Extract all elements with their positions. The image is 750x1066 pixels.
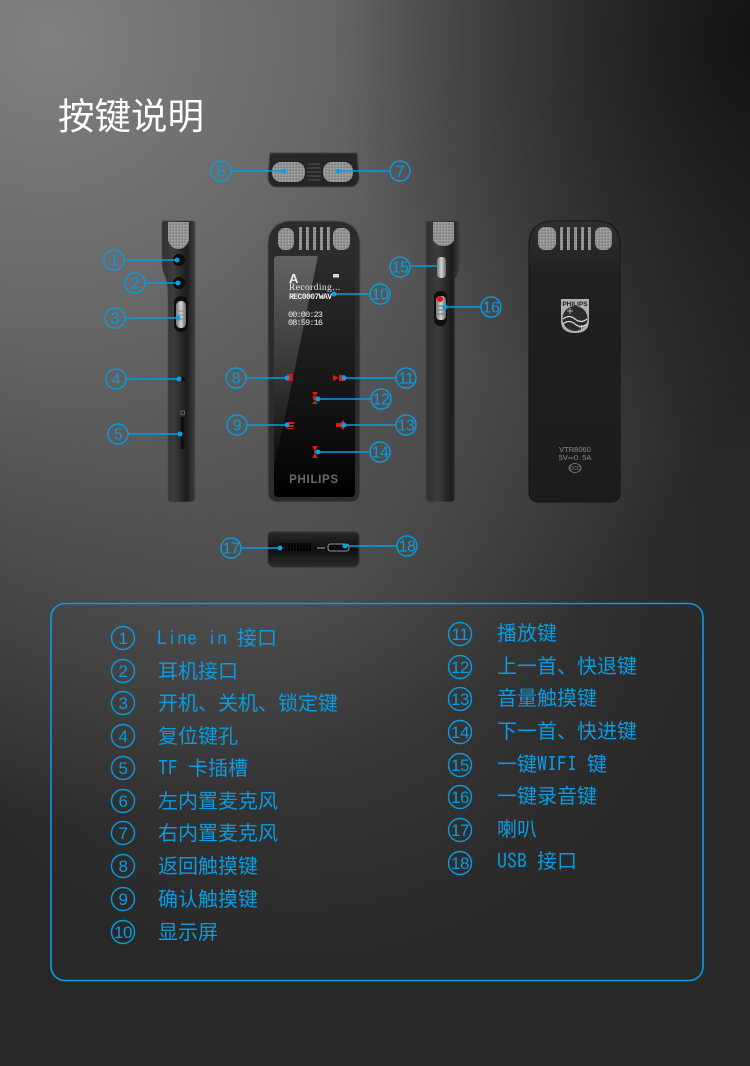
callout 8: 8 bbox=[232, 370, 241, 388]
callout 11: 11 bbox=[398, 370, 414, 388]
item 2: 2 bbox=[119, 662, 128, 681]
logo: PHILIPS wordmark: PHILIPS bbox=[289, 474, 339, 486]
item 4 bbox=[112, 720, 238, 749]
item 11 bbox=[448, 617, 557, 646]
callout 18: 18 bbox=[399, 538, 416, 556]
item 15 bbox=[448, 748, 607, 777]
callout 14 bbox=[316, 442, 390, 462]
item 7: 右内置麦克风 bbox=[158, 817, 278, 846]
logo: Philips shield: PHILIPS bbox=[562, 301, 588, 308]
callout 16: 16 bbox=[483, 300, 500, 316]
item 3: 开机、关机、锁定键 bbox=[158, 687, 338, 716]
callout 6 bbox=[211, 161, 286, 181]
touch icons bbox=[287, 374, 345, 458]
legend panel bbox=[51, 604, 703, 980]
port: line in bbox=[173, 254, 185, 266]
device: bottom view bbox=[268, 532, 359, 567]
reset hole bbox=[181, 377, 185, 381]
logo: Philips shield bbox=[561, 299, 589, 333]
item 10: 10 bbox=[114, 923, 132, 942]
callout 8 bbox=[226, 368, 290, 388]
speaker holes bbox=[280, 543, 310, 551]
screen text: A bbox=[289, 271, 299, 286]
item 9: 9 bbox=[119, 890, 128, 909]
item 4: 4 bbox=[119, 727, 128, 746]
item 14: 14 bbox=[451, 723, 469, 742]
WIFI button bbox=[437, 257, 446, 278]
item 6: 左内置麦克风 bbox=[158, 785, 278, 814]
device: back view bbox=[529, 221, 620, 502]
item 6: 6 bbox=[119, 792, 128, 811]
item 4: 复位键孔 bbox=[158, 720, 238, 749]
item 18 bbox=[448, 845, 577, 874]
callout 1 bbox=[104, 250, 180, 270]
screen text bbox=[288, 271, 340, 328]
item 8 bbox=[112, 850, 258, 879]
callout 2: 2 bbox=[131, 276, 140, 292]
item 7: 7 bbox=[119, 824, 128, 843]
item 17: 17 bbox=[451, 821, 469, 840]
callout 4: 4 bbox=[112, 372, 121, 388]
item 16: 16 bbox=[451, 788, 469, 807]
item 14: 下一首、快进键 bbox=[497, 715, 637, 744]
device: top view bbox=[268, 153, 359, 187]
item 16 bbox=[448, 780, 597, 809]
item 18: 18 bbox=[451, 854, 469, 873]
device: left side view bbox=[162, 221, 195, 502]
item 5 bbox=[112, 752, 248, 781]
model label: 5V⎓0. 5A bbox=[559, 453, 591, 462]
callout 1: 1 bbox=[110, 252, 119, 270]
callout 3: 3 bbox=[111, 310, 120, 328]
screen text: REC0007WAV bbox=[289, 293, 332, 302]
model label: CCC bbox=[570, 466, 581, 472]
callout 10 bbox=[332, 284, 390, 304]
callout 15 bbox=[390, 257, 438, 277]
callout 9: 9 bbox=[233, 418, 242, 434]
legend column: 1 to 10 bbox=[112, 622, 338, 945]
title: 按键说明 bbox=[58, 96, 204, 137]
item 10 bbox=[112, 916, 218, 945]
callout 4 bbox=[106, 369, 182, 389]
callout 5: 5 bbox=[114, 426, 123, 444]
callout 13 bbox=[342, 415, 416, 435]
item 1: 1 bbox=[119, 629, 128, 648]
item 12: 上一首、快退键 bbox=[497, 650, 637, 679]
callout 7 bbox=[336, 161, 410, 181]
item 2 bbox=[112, 655, 238, 684]
item 8: 返回触摸键 bbox=[158, 850, 258, 879]
callout 7: 7 bbox=[396, 164, 405, 180]
item 13: 音量触摸键 bbox=[497, 682, 597, 711]
item 9 bbox=[112, 883, 258, 912]
model label bbox=[559, 445, 591, 472]
item 8: 8 bbox=[119, 857, 128, 876]
item 3: 3 bbox=[119, 694, 128, 713]
callout 9 bbox=[227, 415, 290, 435]
callout 3 bbox=[105, 308, 180, 328]
screen text: 08:59:16 bbox=[288, 318, 323, 328]
item 5: 5 bbox=[119, 759, 128, 778]
callout 5 bbox=[108, 424, 182, 444]
callout 6: 6 bbox=[217, 164, 226, 180]
callout 11 bbox=[342, 368, 416, 388]
item 13: 13 bbox=[451, 690, 469, 709]
item 1: Line in 接口 bbox=[157, 622, 277, 651]
item 10: 显示屏 bbox=[158, 916, 218, 945]
item 13 bbox=[448, 682, 597, 711]
screen text: 00:00:23 bbox=[288, 310, 323, 320]
callout 12: 12 bbox=[373, 392, 390, 408]
item 16: 一键录音键 bbox=[497, 780, 597, 809]
callout 14: 14 bbox=[372, 444, 389, 462]
callout 2 bbox=[125, 273, 180, 293]
callout 18 bbox=[342, 536, 417, 556]
TF card slot bbox=[180, 417, 184, 449]
callout 15: 15 bbox=[392, 260, 409, 276]
item 2: 耳机接口 bbox=[158, 655, 238, 684]
callout 17 bbox=[221, 538, 282, 558]
USB port bbox=[328, 544, 349, 551]
item 15: 一键WIFI 键 bbox=[497, 748, 607, 777]
screen text: Recording... bbox=[289, 283, 340, 293]
item 17: 喇叭 bbox=[497, 813, 537, 842]
front microphone grilles bbox=[278, 227, 350, 250]
port: earphone bbox=[173, 277, 185, 289]
item 12: 12 bbox=[451, 658, 469, 677]
item 17 bbox=[448, 813, 537, 842]
record switch bbox=[434, 291, 447, 326]
callout 16 bbox=[442, 297, 501, 317]
callout 10: 10 bbox=[372, 286, 389, 304]
item 11: 播放键 bbox=[497, 617, 557, 646]
item 18: USB 接口 bbox=[497, 845, 577, 874]
callout 17: 17 bbox=[223, 540, 240, 558]
item 15: 15 bbox=[451, 756, 469, 775]
screen bbox=[274, 256, 355, 497]
item 5: TF 卡插槽 bbox=[158, 752, 248, 781]
item 11: 11 bbox=[452, 625, 468, 644]
callouts on device bbox=[104, 161, 501, 558]
callout 12 bbox=[316, 389, 391, 409]
model label: VTR8060 bbox=[559, 445, 591, 454]
power switch bbox=[174, 296, 188, 332]
device: front view bbox=[268, 221, 360, 502]
legend column: 11 to 18 bbox=[448, 617, 637, 874]
callout 13: 13 bbox=[398, 418, 415, 434]
item 9: 确认触摸键 bbox=[158, 883, 258, 912]
back microphone grilles bbox=[538, 227, 612, 250]
device: right side view bbox=[426, 221, 460, 502]
